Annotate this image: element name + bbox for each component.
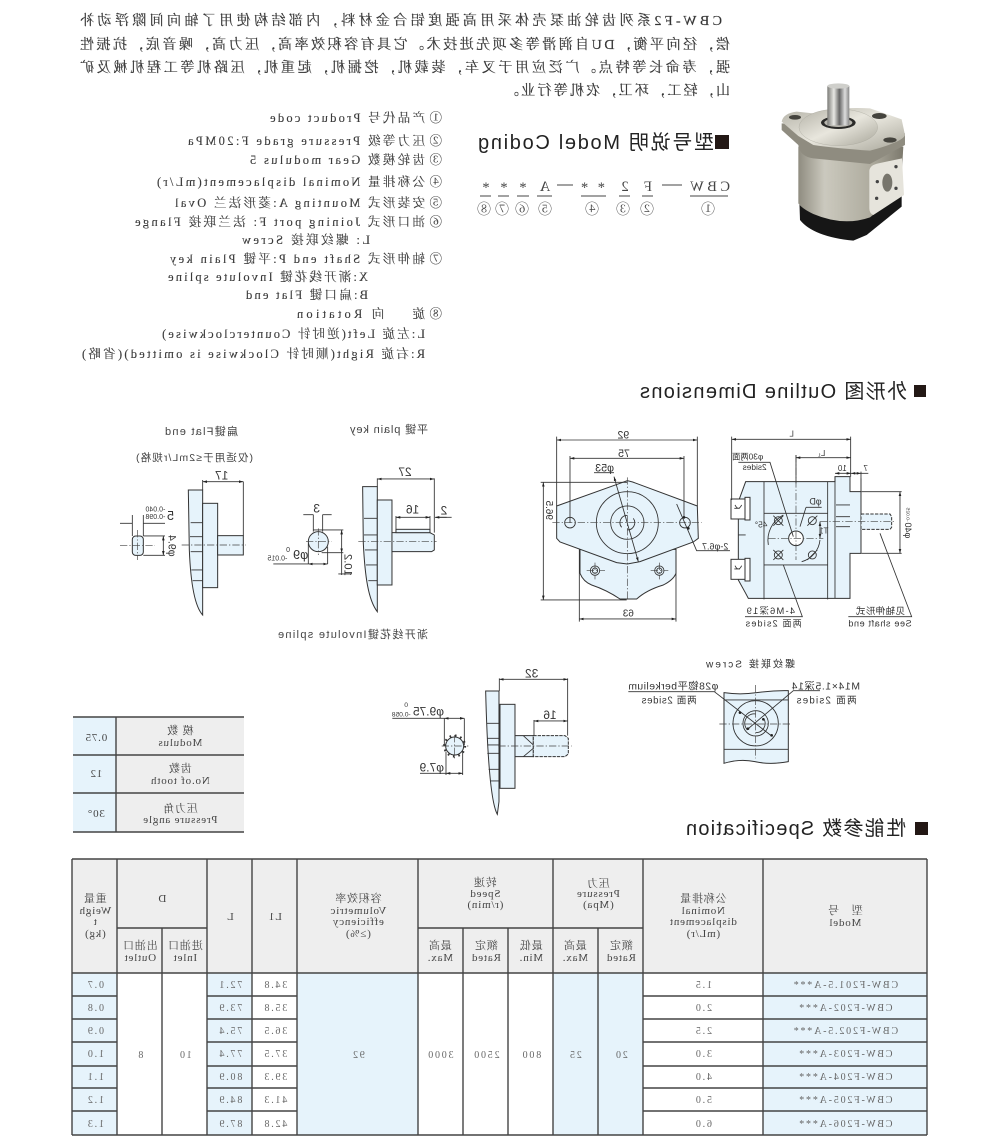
table data rows: CBW-F206-A***	[797, 1119, 893, 1130]
intro paragraph: 强，寿命长等特点。广泛应用于叉车，装载机，挖掘机，起重机，压路机等工程机械及矿	[80, 59, 730, 76]
table header cells: 最高	[428, 938, 452, 952]
table data rows: 20	[614, 1050, 628, 1061]
model code breakdown: *	[519, 180, 527, 196]
intro paragraph: 山，轻工，环卫，农机等行业。	[505, 82, 730, 99]
table data rows: 87.9	[218, 1119, 242, 1130]
drawing: flat end shaft: φ9.4	[165, 535, 177, 557]
drawing: plain key shaft: φ9	[293, 548, 308, 562]
model code breakdown: ②	[640, 202, 654, 218]
table data rows: 2.5	[694, 1026, 712, 1037]
model code breakdown: A	[539, 179, 550, 195]
intro paragraph	[80, 12, 730, 99]
drawing: side view pump: L	[789, 429, 794, 438]
table header cells: Pressure	[576, 888, 620, 900]
model code breakdown: ⑧	[477, 202, 491, 218]
product code legend list: ⑤	[429, 196, 442, 210]
drawing: side view pump: See shaft end	[848, 619, 912, 629]
table header cells: efficiency	[332, 916, 384, 928]
product code legend list: ⑥	[429, 215, 442, 229]
model code breakdown: F	[644, 179, 652, 195]
drawing: involute spline shaft: φ7.9	[419, 761, 444, 775]
drawing: front view flange: 96.5	[543, 500, 554, 520]
model code breakdown: CBW	[690, 179, 730, 195]
drawing labels: shaft end types: 扁键Flat end	[165, 424, 238, 438]
table text: module, teeth, pressure angle: 压力角	[162, 801, 198, 815]
model code breakdown: ③	[616, 202, 630, 218]
table header cells	[79, 875, 863, 964]
drawing: involute spline shaft: 16	[543, 708, 557, 722]
model code breakdown: 2	[621, 179, 629, 195]
table data rows: 1.1	[86, 1072, 104, 1083]
table data rows: 2500	[472, 1050, 500, 1061]
model code breakdown: ⑤	[538, 202, 552, 218]
product code legend list	[82, 110, 442, 361]
drawing: screw port: 两面 2sides	[641, 695, 697, 706]
drawing: front view flange: 92	[617, 430, 629, 442]
heading: specification: 性能参数 Specification	[685, 817, 906, 840]
model code breakdown	[477, 179, 730, 218]
table header cells: (r/min)	[467, 899, 503, 911]
table header cells: 容积效率	[334, 891, 382, 905]
model code breakdown: ①	[701, 202, 715, 218]
drawing: involute spline shaft: -0.058	[391, 711, 411, 718]
table header cells: L1	[268, 911, 282, 923]
table text: module, teeth, pressure angle	[85, 723, 218, 826]
table data rows: 10	[178, 1050, 192, 1061]
table data rows: CBW-F204-A***	[797, 1072, 893, 1083]
table data rows: 2.0	[694, 1003, 712, 1014]
table header cells: Max.	[427, 952, 453, 964]
table data rows: 8	[137, 1050, 143, 1061]
table header cells: 型 号	[827, 903, 863, 917]
drawing: plain key shaft: 27	[398, 465, 412, 479]
drawing: side view pump: 4-M6深19	[747, 606, 795, 616]
table data rows: 41.3	[263, 1095, 287, 1106]
spline parameters table	[73, 717, 244, 832]
table header cells: (mL/r)	[686, 928, 720, 940]
table header cells: Nominal	[681, 905, 725, 917]
table data rows: 92	[351, 1050, 365, 1061]
table data rows: 34.8	[263, 980, 287, 991]
product code legend list: 产品代号 Product code	[270, 110, 425, 125]
table header cells: 重量	[83, 891, 107, 905]
drawing: flat end shaft: -0.040	[145, 507, 165, 514]
drawing: side view pump: 45°	[755, 519, 767, 529]
drawing: screw port: M14×1.5深14	[791, 680, 860, 692]
table data rows: 1.3	[86, 1119, 104, 1130]
model code breakdown: ④	[585, 202, 599, 218]
product code legend list: L: 螺纹联接 Screw	[242, 232, 370, 247]
table header cells: 转速	[473, 875, 497, 889]
drawing: side view pump: φD	[809, 497, 822, 507]
model code breakdown: *	[482, 180, 490, 196]
table header cells: Model	[829, 917, 861, 929]
drawing: plain key shaft: -0.015	[267, 556, 287, 563]
drawing: front view flange: 75	[618, 448, 630, 460]
drawing: plain key shaft: 0	[286, 547, 290, 554]
intro paragraph: 偿，径向平衡，DU自润滑等多项先进技术。它具有容积效率高，压力高，噪音底，抗振性	[80, 36, 730, 53]
drawing labels: shaft end types: 渐开线花键Involute spline	[278, 627, 428, 641]
table data rows: CBW-F202-A***	[797, 1003, 893, 1014]
table header cells: 额定	[474, 938, 498, 952]
drawing: flat end shaft: -0.098	[145, 514, 165, 521]
drawing: involute spline shaft: 0	[404, 702, 408, 709]
table text: module, teeth, pressure angle: Pressure angle	[142, 814, 218, 826]
drawing: side view pump: φ40	[903, 522, 913, 538]
table header cells: 最低	[519, 939, 543, 952]
table header cells: Weigh	[79, 905, 111, 917]
drawing: side view pump	[731, 429, 913, 629]
table data rows: 800	[521, 1050, 541, 1061]
drawing: side view pump: 两面 2sides	[745, 619, 802, 629]
table header cells: Speed	[470, 888, 500, 900]
table header cells: 额定	[609, 938, 633, 952]
product photo: gear pump	[782, 83, 905, 241]
table data rows: 42.8	[263, 1119, 287, 1130]
drawing: side view pump: 7	[863, 464, 868, 473]
table header cells: Volumetric	[330, 905, 386, 917]
drawing: involute spline shaft	[391, 667, 572, 814]
table data rows: 39.3	[263, 1072, 287, 1083]
drawing: side view pump: T1	[818, 526, 828, 535]
table data rows: 0.7	[86, 980, 104, 991]
table data rows: 0.9	[86, 1026, 104, 1037]
drawing: front view flange: 2-φ6.7	[702, 542, 728, 552]
drawing: plain key shaft: 10.2	[341, 554, 353, 576]
table data rows: 6.0	[694, 1119, 712, 1130]
table text: module, teeth, pressure angle: Modulus	[158, 737, 202, 749]
table data rows: 36.5	[263, 1026, 287, 1037]
drawing: screw port	[628, 657, 860, 763]
product code legend list: ①	[429, 111, 442, 125]
table text: module, teeth, pressure angle: 30°	[87, 808, 105, 820]
product code legend list: L:左旋 Left(逆时针 Counterclockwise)	[162, 326, 425, 341]
product code legend list: 压力等级 Pressure grade F:20MPa	[188, 133, 425, 148]
table text: module, teeth, pressure angle: 12	[90, 768, 102, 780]
drawing: involute spline shaft: 32	[525, 667, 538, 681]
table data rows: 73.9	[218, 1003, 242, 1014]
table header cells: 公称排量	[679, 891, 727, 905]
drawing: plain key shaft: 3	[313, 502, 320, 516]
table text: module, teeth, pressure angle: No.of tooth	[150, 775, 210, 787]
model code breakdown: **	[581, 180, 605, 196]
heading: model coding: 型号说明 Model Coding	[477, 131, 714, 154]
drawing: side view pump: -0.025	[905, 507, 911, 522]
table header cells: Min.	[519, 952, 543, 964]
intro paragraph: CBW-F2系列齿轮油泵壳体采用高强度铝合金材料，内部结构使用了轴向间隙浮动补	[80, 12, 722, 29]
drawing: front view flange: 63	[622, 608, 634, 619]
table data rows: CBW-F202.5-A***	[792, 1026, 898, 1037]
specification table	[72, 859, 927, 1135]
table data rows: 84.9	[218, 1095, 242, 1106]
table header cells: 进油口	[167, 938, 203, 952]
drawing labels: shaft end types: 平键 plain key	[350, 422, 428, 436]
table data rows: CBW-F201.5-A***	[792, 980, 898, 991]
table data rows: CBW-F203-A***	[797, 1049, 893, 1060]
table text: module, teeth, pressure angle: 0.75	[85, 732, 107, 744]
table header cells: Max.	[562, 952, 588, 964]
table header cells: 压力	[586, 876, 610, 890]
table data rows: 5.0	[694, 1095, 712, 1106]
table header cells: 最高	[563, 938, 587, 952]
drawing: front view flange	[541, 430, 730, 622]
product code legend list: ⑧	[429, 307, 442, 321]
drawing: plain key shaft: 2	[440, 504, 447, 518]
table data rows: 3000	[426, 1050, 454, 1061]
drawing: side view pump: 10	[837, 464, 847, 473]
table header cells: Inlet	[173, 952, 197, 964]
product code legend list: 油口形式 Joining port F: 法兰联接 Flange	[135, 214, 425, 229]
product code legend list: ④	[429, 175, 442, 189]
table data rows: 1.5	[694, 980, 712, 991]
table header cells: 出油口	[122, 938, 158, 952]
drawing: screw port: 螺纹联接 Screw	[705, 657, 795, 670]
model code breakdown: *	[500, 180, 508, 196]
drawing labels: shaft end types: (仅适用于≤2mL/r规格)	[136, 451, 253, 464]
product code legend list: ⑦	[429, 252, 442, 266]
drawing: involute spline shaft: φ9.75	[413, 705, 444, 719]
drawing: side view pump: L₁	[818, 449, 825, 458]
model code breakdown: ⑥	[515, 202, 529, 218]
table header cells: t	[93, 916, 97, 928]
drawing: flat end shaft: 5	[167, 509, 174, 523]
drawing: flat end shaft	[120, 468, 246, 615]
table data rows: CBW-F205-A***	[797, 1095, 893, 1106]
table data rows: 72.1	[218, 980, 242, 991]
product code legend list: 旋 向 Rotation	[296, 306, 425, 321]
drawing: screw port: φ28锪平berkelium	[628, 679, 718, 692]
table header cells: displacement	[669, 916, 737, 928]
table data rows	[86, 980, 898, 1130]
table data rows: 35.8	[263, 1003, 287, 1014]
drawing: front view flange: φ53	[595, 463, 614, 475]
table data rows: 0.8	[86, 1003, 104, 1014]
table data rows: 80.9	[218, 1072, 242, 1083]
table data rows: 77.4	[218, 1049, 242, 1060]
table header cells: Rated	[606, 952, 636, 964]
table header cells: Outlet	[124, 952, 156, 964]
drawing: side view pump: φ30两面	[732, 451, 763, 461]
table text: module, teeth, pressure angle: 齿数	[168, 761, 192, 775]
table header cells: D	[158, 893, 166, 905]
drawing: plain key shaft	[267, 465, 452, 612]
drawing: plain key shaft: 16	[406, 502, 419, 516]
table data rows: 4.0	[694, 1072, 712, 1083]
drawing: side view pump: 2sides	[743, 462, 767, 472]
table data rows: 1.2	[86, 1095, 104, 1106]
model code breakdown: ⑦	[495, 202, 509, 218]
product code legend list: 安装形式 Mounting A:菱形法兰 Oval	[174, 195, 425, 210]
table text: module, teeth, pressure angle: 模 数	[166, 723, 194, 737]
table header cells: L	[226, 911, 234, 923]
product code legend list: ③	[429, 153, 442, 167]
drawing: screw port: 两面 2sides	[796, 695, 857, 706]
table data rows: 75.4	[218, 1026, 242, 1037]
heading: outline dimensions: 外形图 Outline Dimensions	[639, 380, 907, 403]
product code legend list: 齿轮模数 Gear modulus 5	[250, 152, 425, 167]
product code legend list: 公称排量 Nominal displacement(mL/r)	[157, 174, 425, 189]
drawing: flat end shaft: 17	[215, 468, 228, 482]
table data rows: 1.0	[86, 1049, 104, 1060]
drawing labels: shaft end types	[136, 422, 428, 641]
table header cells: (kg)	[84, 928, 106, 940]
drawing: side view pump: 见轴伸形式	[856, 605, 905, 616]
product code legend list: 轴伸形式 Shaft end P:平键 Plain key	[169, 251, 425, 266]
product code legend list: ②	[429, 134, 442, 148]
table data rows: 3.0	[694, 1049, 712, 1060]
table header cells: (Mpa)	[582, 899, 614, 911]
product code legend list: X:渐开线花键 Involute spline	[168, 269, 368, 284]
product code legend list: B:扁口键 Flat end	[245, 287, 368, 302]
table header cells: (≥%)	[345, 928, 371, 940]
product code legend list: R:右旋 Right(顺时针 Clockwise is omitted)(省略)	[82, 346, 425, 361]
table header cells: Rated	[471, 952, 501, 964]
table data rows: 25	[568, 1050, 582, 1061]
table data rows: 37.5	[263, 1049, 287, 1060]
